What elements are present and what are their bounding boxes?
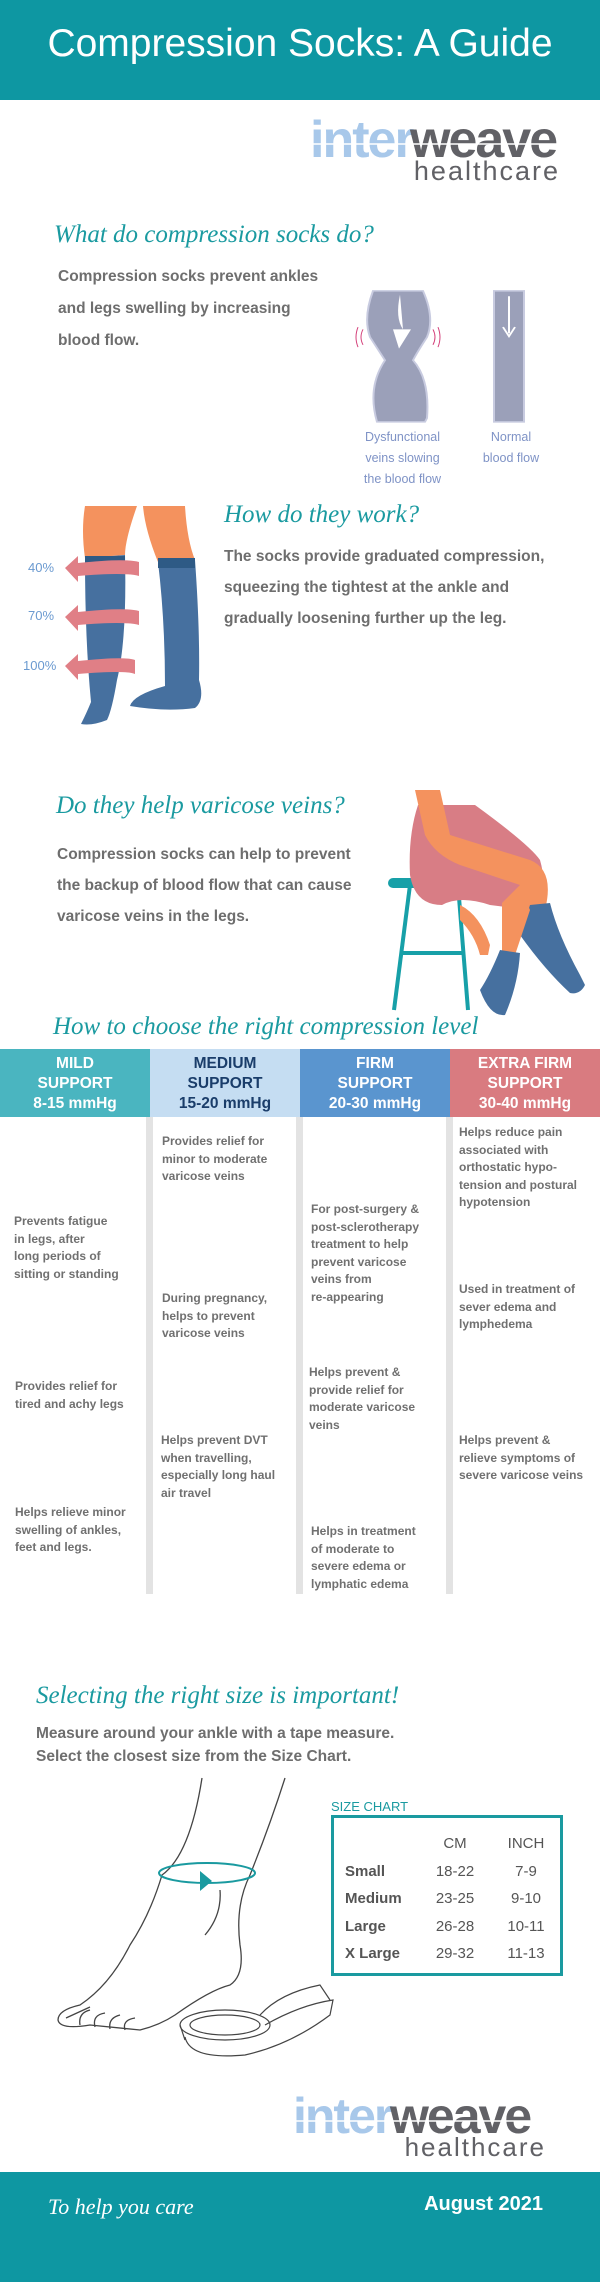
text: varicose veins: [162, 1326, 245, 1340]
size chart: [331, 1799, 563, 1976]
illustration: legs with socks: 70%: [28, 608, 54, 623]
text: Helps prevent DVT: [161, 1433, 268, 1447]
heading: size: Selecting the right size is important!: [36, 1682, 399, 1709]
size chart: 23-25: [436, 1890, 474, 1907]
header: firm: 20-30 mmHg: [329, 1095, 421, 1112]
tagline: To help you care: [48, 2194, 194, 2219]
text: tired and achy legs: [15, 1396, 124, 1410]
text: air travel: [161, 1486, 211, 1500]
text: severe varicose veins: [459, 1468, 583, 1482]
tape measure: [180, 1985, 333, 2056]
text: moderate varicose: [309, 1400, 415, 1414]
date: August 2021: [424, 2193, 543, 2215]
header: firm: [300, 1049, 450, 1117]
caption: normal: Normal blood flow: [483, 430, 539, 465]
text: lymphedema: [459, 1317, 532, 1331]
extra firm texts: Helps reduce pain: [459, 1125, 562, 1139]
firm texts: treatment to help: [311, 1237, 408, 1251]
text: what: and legs swelling by increasing: [58, 300, 291, 317]
header: medium: MEDIUM: [194, 1055, 256, 1072]
text: Used in treatment of: [459, 1282, 575, 1296]
logo bottom: healthcare: [405, 2132, 546, 2162]
mild texts: Prevents fatigue: [14, 1214, 107, 1228]
size chart: INCH: [508, 1835, 544, 1852]
firm texts: veins from: [311, 1272, 372, 1286]
mild texts: long periods of: [14, 1249, 101, 1263]
firm texts: [311, 1202, 419, 1304]
logo top: inter: [310, 112, 414, 169]
extra firm texts: orthostatic hypo-: [459, 1160, 557, 1174]
text: size: [36, 1725, 394, 1765]
size chart: 10-11: [507, 1918, 545, 1934]
header: extra firm: 30-40 mmHg: [479, 1095, 571, 1112]
text: how: gradually loosening further up the leg.: [224, 610, 506, 627]
footer banner: [0, 2172, 600, 2282]
caption: dysfunctional: Dysfunctional veins slowing the blood flow: [364, 430, 441, 486]
illustration: woman on stool: [388, 790, 585, 1016]
header: mild: MILD: [56, 1055, 94, 1072]
logo top: weave: [409, 112, 557, 169]
illustration: foot with ankle measure: [57, 1778, 334, 2056]
dysfunctional vein: [356, 291, 440, 422]
text: Helps in treatment: [311, 1524, 416, 1538]
title: Compression Socks: A Guide: [47, 22, 553, 65]
firm texts: post-sclerotherapy: [311, 1220, 419, 1234]
size chart: 9-10: [511, 1890, 541, 1907]
extra firm texts: tension and postural: [459, 1178, 577, 1192]
header: firm: FIRM: [356, 1055, 394, 1072]
header: mild: [0, 1049, 150, 1117]
size chart: 18-22: [436, 1862, 474, 1880]
size chart: Small: [345, 1862, 385, 1880]
text: Helps prevent &: [309, 1365, 400, 1379]
heading: how do they work: How do they work?: [224, 501, 419, 528]
firm texts: For post-surgery &: [311, 1202, 419, 1216]
text: when travelling,: [161, 1450, 252, 1464]
medium texts: [162, 1134, 267, 1183]
header: medium: SUPPORT: [188, 1075, 262, 1092]
text: especially long haul: [161, 1468, 275, 1482]
text: what: blood flow.: [58, 332, 139, 349]
header: extra firm: EXTRA FIRM: [478, 1055, 572, 1072]
header: extra firm: SUPPORT: [488, 1075, 562, 1092]
text: relieve symptoms of: [459, 1450, 575, 1464]
mild texts: in legs, after: [14, 1232, 85, 1246]
illustration: legs with socks: 40%: [28, 560, 54, 575]
medium texts: minor to moderate: [162, 1152, 267, 1166]
firm texts: prevent varicose: [311, 1254, 406, 1268]
logo top: [310, 112, 560, 186]
size chart: 29-32: [436, 1945, 474, 1962]
header: medium: 15-20 mmHg: [179, 1095, 271, 1112]
text: of moderate to: [311, 1542, 394, 1556]
firm texts: re-appearing: [311, 1290, 384, 1304]
header: firm: SUPPORT: [338, 1075, 412, 1092]
text: provide relief for: [309, 1382, 404, 1396]
size chart: 7-9: [515, 1862, 537, 1880]
heading: varicose: Do they help varicose veins?: [56, 792, 345, 819]
heading: what do compression socks do: What do compression socks do?: [54, 221, 374, 248]
header: mild: 8-15 mmHg: [33, 1095, 117, 1112]
text: varicose: the backup of blood flow that can cause: [57, 877, 352, 894]
text: how: The socks provide graduated compression,: [224, 548, 544, 565]
size chart: X Large: [345, 1945, 400, 1962]
text: what: Compression socks prevent ankles: [58, 268, 318, 285]
text: Provides relief for: [15, 1379, 117, 1393]
header: medium: [150, 1049, 300, 1117]
text: Helps prevent &: [459, 1433, 550, 1447]
header: mild: SUPPORT: [38, 1075, 112, 1092]
heading: compression level: How to choose the right compression level: [53, 1013, 478, 1040]
size chart: 11-13: [507, 1945, 545, 1962]
text: helps to prevent: [162, 1308, 255, 1322]
text: size: Measure around your ankle with a tape measure.: [36, 1725, 394, 1742]
text: veins: [309, 1418, 340, 1432]
extra firm texts: associated with: [459, 1142, 548, 1156]
extra firm texts: hypotension: [459, 1195, 530, 1209]
illustration: legs with socks: 100%: [23, 658, 57, 673]
illustration: legs with socks: [23, 506, 202, 724]
logo top: healthcare: [414, 156, 560, 186]
text: lymphatic edema: [311, 1576, 408, 1590]
size chart: Medium: [345, 1890, 402, 1907]
text: Helps relieve minor: [15, 1505, 126, 1519]
mild texts: sitting or standing: [14, 1266, 119, 1280]
text: swelling of ankles,: [15, 1522, 121, 1536]
vein diagram: [356, 290, 525, 423]
text: varicose: Compression socks can help to prevent: [57, 846, 351, 863]
compression table: [146, 1117, 453, 1594]
size chart: 26-28: [436, 1918, 474, 1934]
size chart: CM: [443, 1835, 467, 1852]
size chart: Large: [345, 1918, 386, 1934]
text: size: Select the closest size from the Size Chart.: [36, 1748, 351, 1765]
header: extra firm: [450, 1049, 600, 1117]
text: feet and legs.: [15, 1540, 92, 1554]
text: varicose: varicose veins in the legs.: [57, 908, 249, 925]
medium texts: Provides relief for: [162, 1134, 264, 1148]
extra firm texts: [459, 1125, 577, 1209]
text: how: [224, 548, 544, 627]
text: severe edema or: [311, 1559, 406, 1573]
size chart label: SIZE CHART: [331, 1799, 408, 1814]
logo bottom: [293, 2093, 546, 2162]
header banner: [0, 0, 600, 100]
text: During pregnancy,: [162, 1291, 267, 1305]
column dividers: [146, 1117, 153, 1594]
text: varicose: [57, 846, 352, 925]
text: how: squeezing the tightest at the ankle and: [224, 579, 509, 596]
text: what: [58, 268, 318, 349]
normal vein: [494, 291, 524, 422]
medium texts: varicose veins: [162, 1169, 245, 1183]
mild texts: [14, 1214, 119, 1280]
text: sever edema and: [459, 1300, 556, 1314]
